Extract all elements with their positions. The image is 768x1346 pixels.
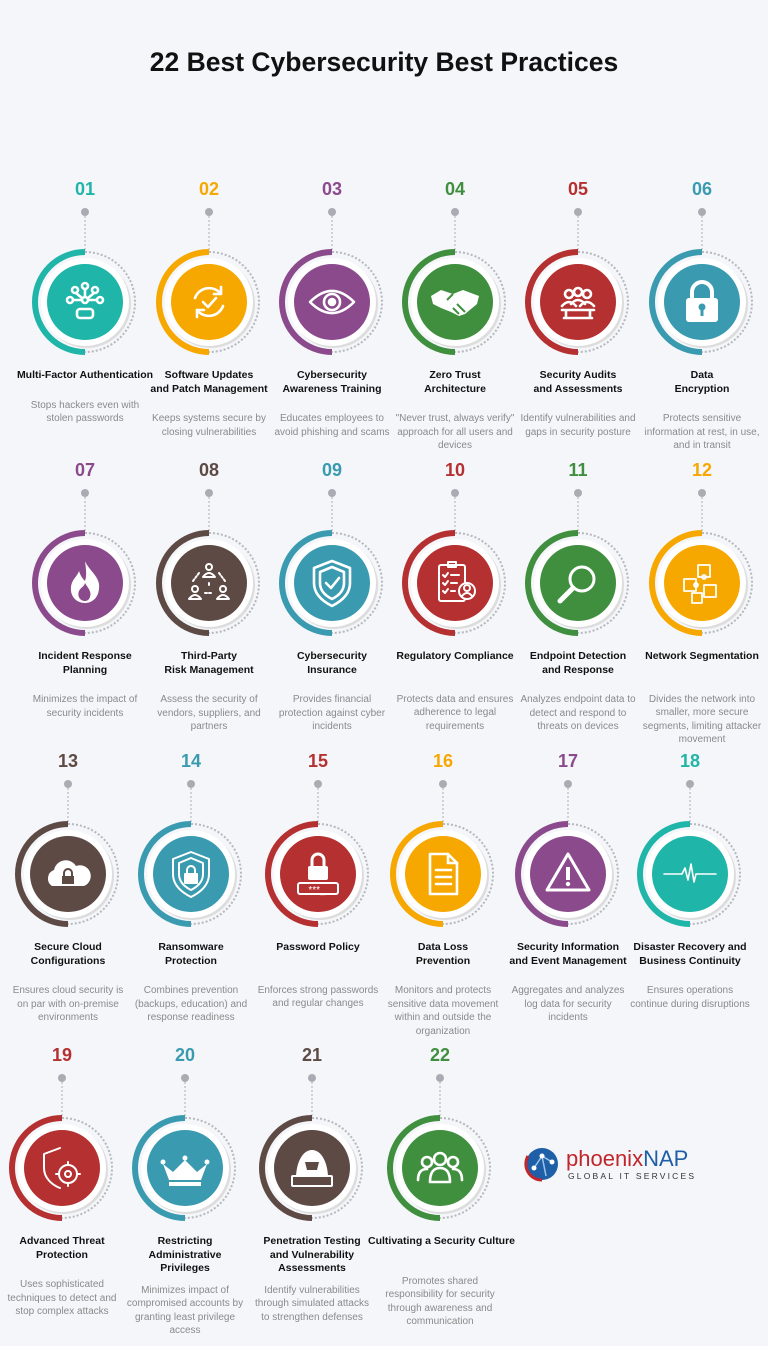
item 14: Protection	[165, 954, 217, 966]
item 14: Combines prevention (backups, education) and response readiness	[135, 985, 247, 1023]
item 08: 08	[199, 460, 219, 480]
item 13: Secure Cloud	[34, 941, 102, 953]
item 22	[368, 1045, 515, 1327]
item 02: Keeps systems secure by closing vulnerabilities	[152, 413, 266, 438]
item 20: Restricting	[158, 1235, 212, 1247]
item 11: Analyzes endpoint data to detect and respond to threats on devices	[520, 694, 636, 732]
item 03: Cybersecurity	[297, 369, 367, 381]
item 18: Disaster Recovery and	[633, 941, 747, 953]
item 05	[520, 179, 636, 438]
item 20	[127, 1045, 243, 1336]
item 14: 14	[181, 751, 201, 771]
item 03: Awareness Training	[282, 382, 382, 394]
item 12: 12	[692, 460, 712, 480]
item 13: Ensures cloud security is on par with on-premise environments	[13, 985, 123, 1023]
item 01: Stops hackers even with stolen passwords	[31, 400, 139, 424]
item 21	[255, 1045, 369, 1322]
item 05: Identify vulnerabilities and gaps in security posture	[520, 413, 636, 438]
item 18: Business Continuity	[639, 954, 741, 966]
logo: phoenixNAP	[524, 1146, 696, 1182]
item 04: "Never trust, always verify" approach for all users and devices	[396, 413, 514, 451]
item 08	[156, 460, 261, 732]
item 10: 10	[445, 460, 465, 480]
item 19: Uses sophisticated techniques to detect and stop complex attacks	[8, 1279, 116, 1317]
item 09: Cybersecurity	[297, 650, 367, 662]
item 10: Regulatory Compliance	[396, 650, 514, 662]
item 02: and Patch Management	[150, 382, 268, 394]
item 01	[17, 179, 153, 424]
item 08: Third-Party	[181, 650, 237, 662]
item 04: Architecture	[424, 382, 486, 394]
item 08: Assess the security of vendors, suppliers, and partners	[157, 694, 261, 732]
title: 22 Best Cybersecurity Best Practices	[150, 47, 618, 77]
item 12	[643, 460, 762, 745]
item 07	[32, 460, 138, 718]
item 04	[396, 179, 514, 451]
item 12: Divides the network into smaller, more secure segments, limiting attacker movement	[643, 694, 761, 745]
item 11: 11	[568, 460, 588, 480]
item 16: Data Loss	[418, 941, 468, 953]
item 15: 15	[308, 751, 328, 771]
item 18	[630, 751, 750, 1010]
item 17	[509, 751, 627, 1023]
item 18: Ensures operations continue during disruptions	[630, 985, 750, 1010]
item 07: Incident Response	[38, 650, 132, 662]
item 02: 02	[199, 179, 219, 199]
item 15: Password Policy	[276, 941, 360, 953]
item 11: Endpoint Detection	[530, 650, 626, 662]
item 16	[388, 751, 498, 1036]
item 11: and Response	[542, 664, 614, 676]
item 18: 18	[680, 751, 700, 771]
item 13: Configurations	[31, 954, 105, 966]
item 04: 04	[445, 179, 465, 199]
item 08: Risk Management	[164, 664, 254, 676]
item 20: Privileges	[160, 1262, 210, 1274]
item 03	[274, 179, 390, 438]
item 06: Protects sensitive information at rest, in use, and in transit	[644, 413, 760, 451]
item 03: 03	[322, 179, 342, 199]
item 17: Aggregates and analyzes log data for security incidents	[512, 985, 624, 1023]
item 16: Monitors and protects sensitive data movement within and outside the organization	[388, 985, 498, 1036]
item 01: 01	[75, 179, 95, 199]
item 21: 21	[302, 1045, 322, 1065]
item 15	[258, 751, 378, 1009]
item 06: Data	[691, 369, 713, 381]
item 16: Prevention	[416, 954, 470, 966]
item 07: Minimizes the impact of security incidents	[33, 694, 137, 718]
item 21: Penetration Testing	[263, 1235, 361, 1247]
item 10	[396, 460, 514, 732]
item 04: Zero Trust	[429, 369, 481, 381]
item 12: Network Segmentation	[645, 650, 759, 662]
item 09	[279, 460, 385, 732]
item 17: and Event Management	[509, 954, 627, 966]
item 09: 09	[322, 460, 342, 480]
item 19: Protection	[36, 1248, 88, 1260]
item 17: 17	[558, 751, 578, 771]
item 16: 16	[433, 751, 453, 771]
item 15: ***_	[308, 885, 326, 896]
item 21: Identify vulnerabilities through simulated attacks to strengthen defenses	[255, 1284, 369, 1322]
item 05: Security Audits	[540, 369, 616, 381]
item 15: Enforces strong passwords and regular changes	[258, 984, 378, 1009]
item 20: Minimizes impact of compromised accounts by granting least privilege access	[127, 1284, 243, 1336]
item 05: and Assessments	[534, 382, 622, 394]
item 22: Promotes shared responsibility for security through awareness and communication	[385, 1276, 495, 1327]
item 01: Multi-Factor Authentication	[17, 369, 153, 381]
item 13	[13, 751, 123, 1023]
item 19	[8, 1045, 116, 1317]
item 05: 05	[568, 179, 588, 199]
item 17: Security Information	[517, 941, 619, 953]
item 09: Provides financial protection against cyber incidents	[279, 694, 385, 732]
item 06	[644, 179, 760, 451]
item 22: Cultivating a Security Culture	[368, 1235, 515, 1247]
item 20: 20	[175, 1045, 195, 1065]
item 07: 07	[75, 460, 95, 480]
item 21: Assessments	[278, 1262, 346, 1274]
logo: phoenixNAP: GLOBAL IT SERVICES	[568, 1171, 696, 1181]
item 22: 22	[430, 1045, 450, 1065]
logo: phoenixNAP: phoenixNAP	[566, 1146, 688, 1171]
item 02: Software Updates	[165, 369, 253, 381]
item 13: 13	[58, 751, 78, 771]
item 19: 19	[52, 1045, 72, 1065]
item 20: Administrative	[149, 1248, 221, 1260]
item 19: Advanced Threat	[19, 1235, 105, 1247]
item 06: Encryption	[675, 382, 729, 394]
item 06: 06	[692, 179, 712, 199]
item 14	[135, 751, 247, 1023]
item 21: and Vulnerability	[270, 1248, 354, 1260]
item 10: Protects data and ensures adherence to legal requirements	[397, 694, 513, 732]
item 14: Ransomware	[158, 941, 224, 953]
item 07: Planning	[63, 664, 107, 676]
item 03: Educates employees to avoid phishing and scams	[274, 413, 390, 438]
item 09: Insurance	[307, 664, 357, 676]
item 02	[150, 179, 268, 438]
item 11	[520, 460, 636, 732]
